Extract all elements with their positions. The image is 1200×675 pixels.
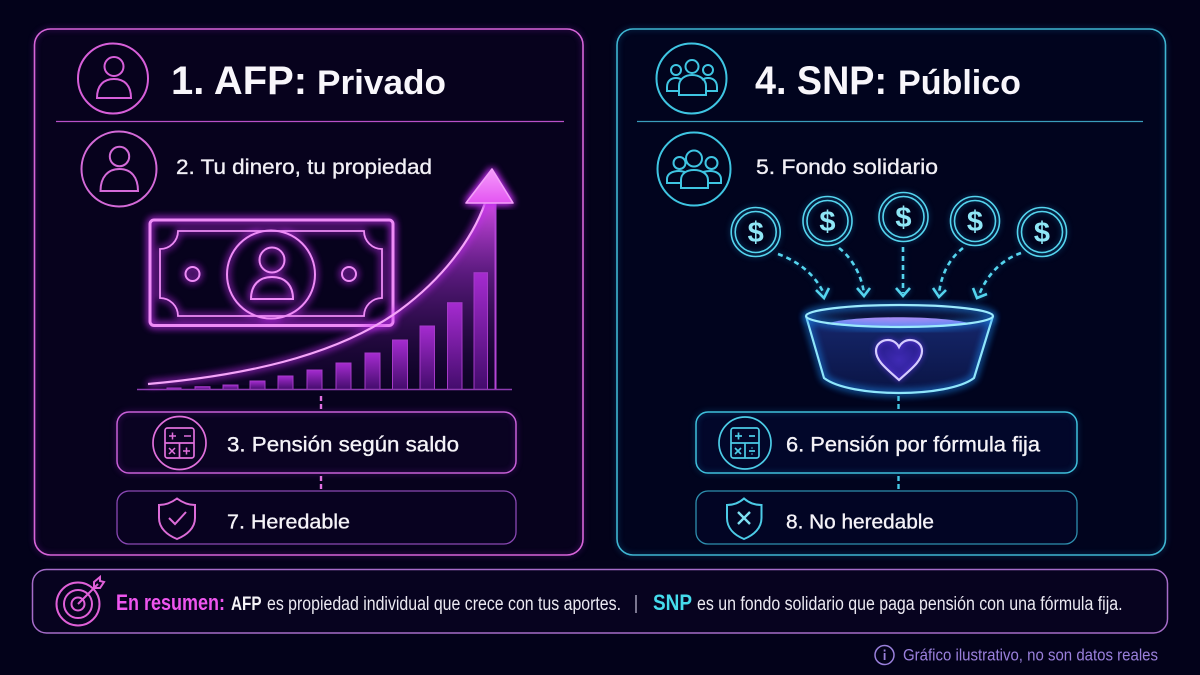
subtitle: Tu dinero, tu propiedad: 2. Tu dinero, tu propiedad bbox=[176, 155, 432, 179]
icon: banknote with person bbox=[150, 220, 393, 326]
icon: dollar coins: $ bbox=[895, 202, 912, 234]
title: 4. SNP: Público: 4. SNP: bbox=[755, 59, 887, 103]
title: 1. AFP: Privado: 1. AFP: bbox=[171, 59, 307, 103]
summary text: SNP bbox=[653, 590, 1122, 615]
header icon: person bbox=[78, 44, 148, 114]
panel: SNP público bbox=[617, 29, 1166, 555]
chart: growth bars bbox=[137, 203, 512, 390]
footnote: Gráfico ilustrativo, no son datos reales bbox=[903, 646, 1158, 664]
summary text: AFP bbox=[116, 590, 621, 615]
label 3: 3. Pensión según saldo bbox=[227, 432, 459, 456]
icon: person in circle bbox=[82, 132, 156, 206]
icon: shield check bbox=[159, 498, 195, 539]
title: 1. AFP: Privado bbox=[171, 59, 446, 103]
label 7: 7. Heredable bbox=[227, 510, 350, 534]
card: Pensión por fórmula fija bbox=[696, 412, 1077, 473]
header icon: people group bbox=[656, 44, 726, 114]
icon: dollar coins: $ bbox=[748, 217, 764, 249]
icon: dollar coins: $ bbox=[967, 206, 983, 238]
subtitle: Fondo solidario: 5. Fondo solidario bbox=[756, 155, 938, 179]
summary text: SNP: SNP bbox=[653, 590, 692, 615]
summary text: SNP: es un fondo solidario que paga pensión con una fórmula fija. bbox=[697, 594, 1122, 615]
icon: dollar coins: $ bbox=[1034, 217, 1050, 249]
title: 4. SNP: Público: Público bbox=[898, 64, 1021, 102]
title: 4. SNP: Público bbox=[755, 59, 1021, 103]
card: No heredable bbox=[696, 491, 1077, 544]
arrow: rising growth curve bbox=[148, 169, 513, 389]
icon: dollar coins: $ bbox=[819, 206, 836, 238]
label 6: 6. Pensión por fórmula fija bbox=[786, 432, 1040, 456]
summary text: AFP: En resumen: bbox=[116, 590, 225, 615]
icon: people group in circle bbox=[658, 132, 730, 206]
panel: AFP privado bbox=[34, 29, 583, 555]
summary text: AFP: es propiedad individual que crece con tus aportes. bbox=[267, 594, 621, 615]
arrows: dashed contributions into bowl bbox=[778, 247, 1021, 298]
icon: calculator bbox=[153, 416, 206, 470]
card: Pensión según saldo bbox=[117, 412, 516, 473]
icon: calculator bbox=[719, 417, 771, 469]
label 8: 8. No heredable bbox=[786, 510, 934, 534]
icon: target with arrow bbox=[56, 577, 104, 626]
icon: solidarity bowl with heart bbox=[806, 305, 993, 393]
title: 1. AFP: Privado: Privado bbox=[317, 64, 446, 102]
summary bar bbox=[32, 570, 1168, 633]
card: Heredable bbox=[117, 491, 516, 544]
icon: dollar coins bbox=[731, 192, 1066, 256]
icon: shield cross bbox=[727, 498, 762, 539]
summary text: AFP: AFP bbox=[231, 594, 262, 615]
